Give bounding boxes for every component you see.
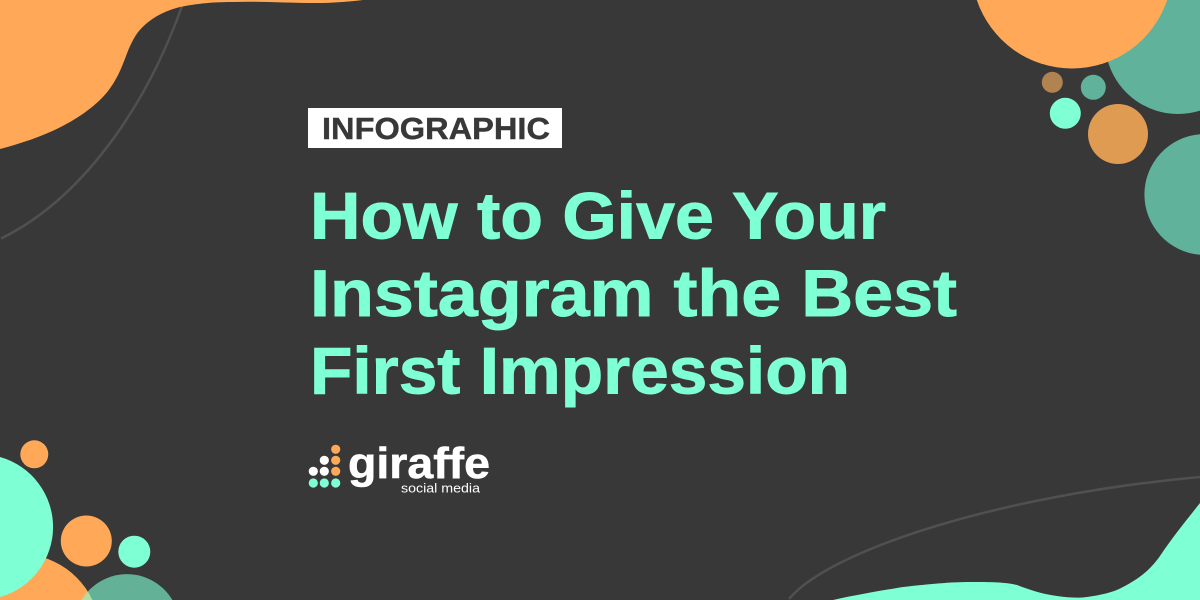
logo tagline: social media [401, 482, 480, 496]
title: How to Give Your [310, 179, 886, 253]
circle: medium orange [1088, 104, 1148, 164]
circle: bottom orange [0, 554, 92, 600]
circle: small orange top [20, 440, 48, 468]
title: Instagram the Best [310, 256, 957, 330]
tag: INFOGRAPHIC: INFOGRAPHIC [322, 111, 550, 146]
decorative circles: bottom-left [0, 440, 172, 600]
circle: small mint [118, 536, 150, 568]
circle: large mint [0, 457, 53, 597]
circle: large teal [1105, 0, 1200, 114]
title: First Impression [310, 334, 850, 408]
circle: small teal [1081, 75, 1106, 100]
blob: top-left orange [0, 0, 363, 149]
circle: translucent teal [82, 574, 172, 600]
circle: small mint [1050, 98, 1081, 129]
icon: logo dots [309, 445, 340, 488]
title [310, 179, 957, 408]
circle: right teal [1144, 134, 1200, 255]
blob: bottom-right mint [833, 503, 1200, 600]
decorative circles: top-right [977, 0, 1200, 255]
logo wordmark: giraffe [348, 439, 490, 488]
circle: small brown [1042, 72, 1063, 93]
circle: medium orange [61, 516, 112, 566]
logo: giraffe social media [309, 439, 490, 496]
circle: large orange [977, 0, 1167, 69]
